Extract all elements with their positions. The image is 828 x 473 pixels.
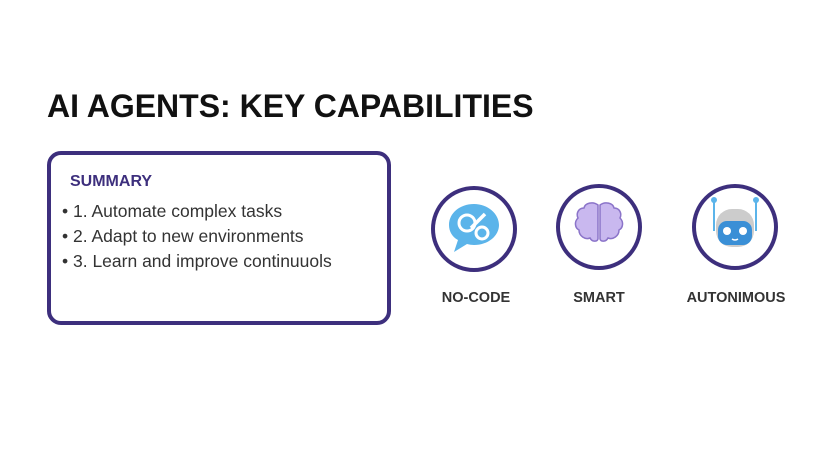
summary list <box>62 201 332 271</box>
summary list: • 1. Automate complex tasks <box>62 201 282 221</box>
summary list: • 3. Learn and improve continuuols <box>62 251 332 271</box>
summary list: • 2. Adapt to new environments <box>62 226 304 246</box>
label: autonimous: AUTONIMOUS <box>687 290 785 306</box>
label: no-code: NO-CODE <box>442 290 510 306</box>
panel: summary <box>47 151 391 325</box>
title: AI AGENTS: KEY CAPABILITIES <box>47 88 534 124</box>
icon: robot <box>692 184 778 270</box>
icon: no-code <box>431 186 517 272</box>
label: smart: SMART <box>573 290 625 306</box>
summary heading: SUMMARY <box>70 173 152 190</box>
icon: brain <box>556 184 642 270</box>
